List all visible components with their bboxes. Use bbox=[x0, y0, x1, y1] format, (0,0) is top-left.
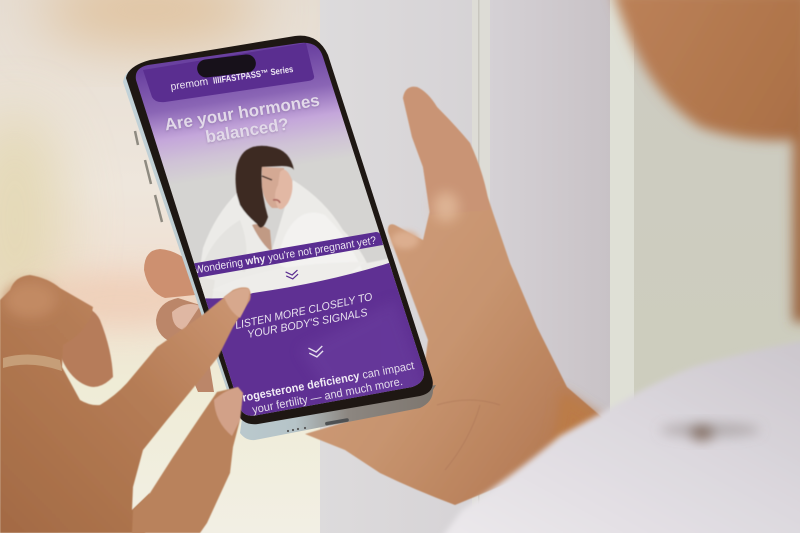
body text: your fertility — and much more. bbox=[251, 376, 404, 416]
phone bezel bbox=[126, 36, 433, 424]
phone side buttons bbox=[135, 131, 162, 222]
shirt shadow fold bbox=[660, 423, 760, 441]
chevron icon: lower bbox=[308, 346, 324, 358]
pointing hand: index finger and back of hand bbox=[0, 275, 251, 533]
heading: balanced? bbox=[204, 114, 290, 147]
header bar bbox=[143, 43, 314, 102]
header logo and series name: premom bbox=[170, 76, 209, 93]
photo: woman wrapped in white blanket bbox=[190, 146, 392, 300]
body text: Progesterone deficiency can impact bbox=[234, 360, 416, 406]
chevron icon: upper bbox=[286, 270, 299, 280]
person's head, blurred foreground bbox=[612, 0, 800, 322]
heading: Are your hormones bbox=[163, 91, 321, 134]
phone bottom edge with speaker and port bbox=[287, 418, 349, 432]
purple lower panel bbox=[205, 263, 424, 416]
handwritten text: LISTEN MORE CLOSELY TO bbox=[234, 291, 374, 332]
pointing hand: curled finger bbox=[60, 307, 113, 387]
holding hand: palm and thumb bbox=[305, 87, 604, 505]
index fingernail bbox=[224, 288, 249, 318]
subheading banner: Wondering why you're not pregnant yet? bbox=[194, 235, 377, 276]
phone screen bbox=[136, 42, 424, 416]
holding hand: fingers behind phone bbox=[144, 249, 214, 392]
diagonal shading on lower panel bbox=[342, 384, 418, 400]
pointing hand: thumb bbox=[132, 387, 243, 533]
header logo and series name bbox=[170, 66, 294, 92]
camera notch bbox=[197, 54, 256, 78]
header logo and series name: IIIIFASTPASS™ Series bbox=[212, 64, 294, 86]
handwritten text: YOUR BODY'S SIGNALS bbox=[246, 307, 369, 341]
gold ring bbox=[3, 354, 62, 371]
heading bbox=[166, 97, 320, 144]
phone body bbox=[123, 37, 436, 440]
white shirt shoulder bbox=[440, 340, 800, 533]
